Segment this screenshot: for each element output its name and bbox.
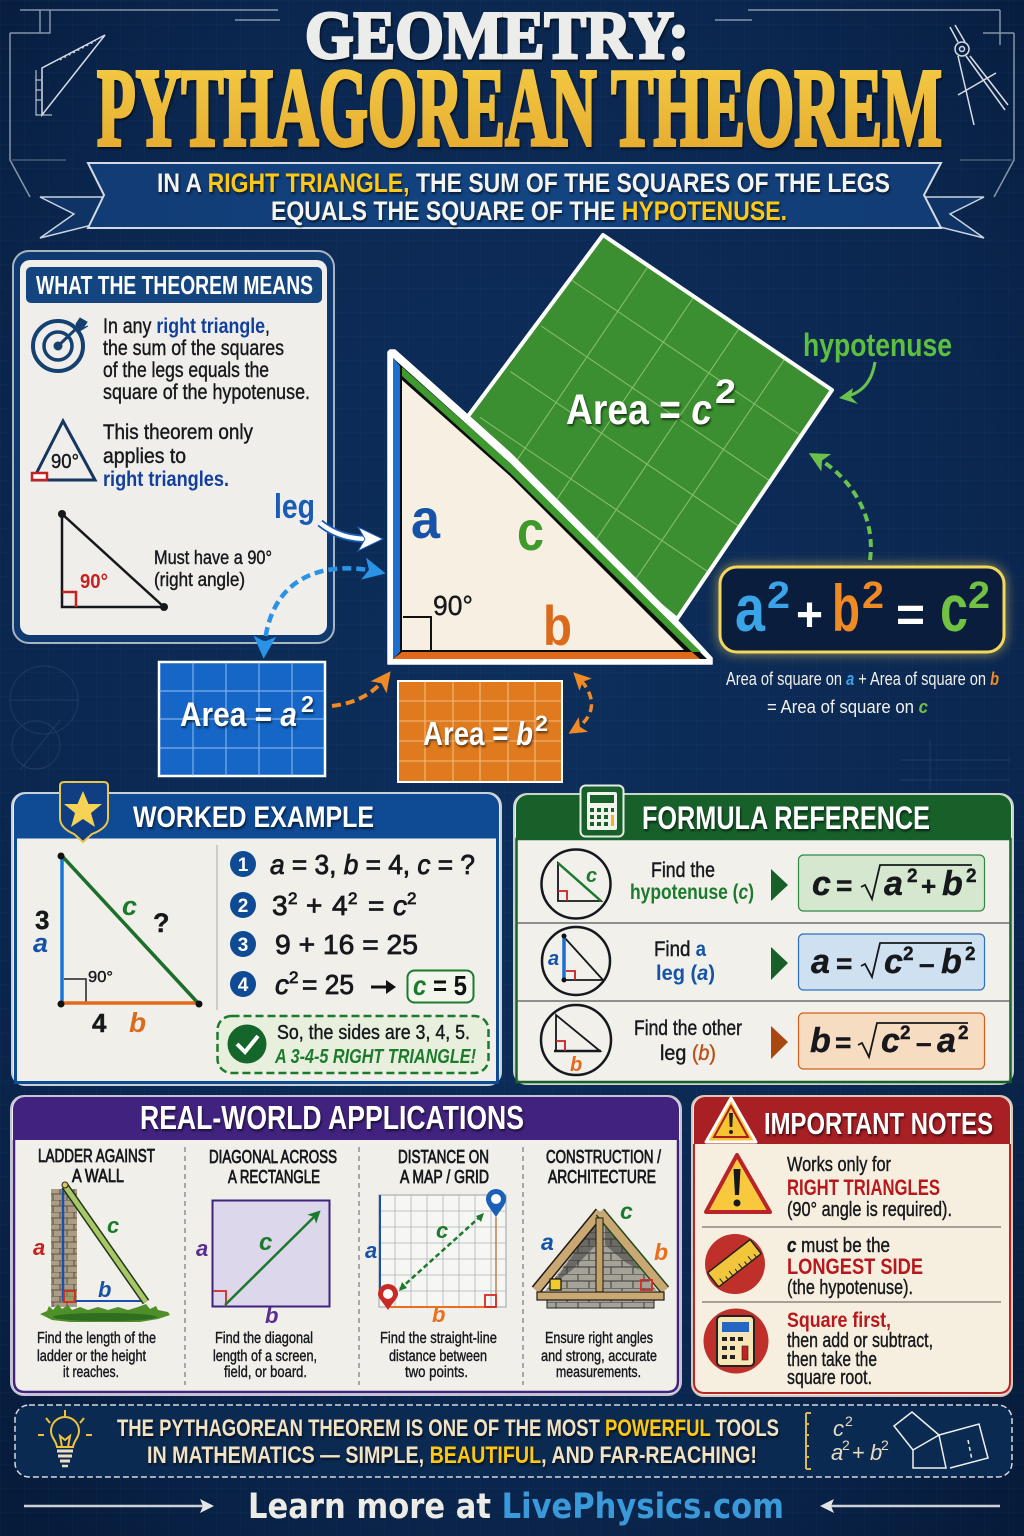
note: square first [704, 1308, 933, 1389]
label: area b squared: Area = b [423, 715, 533, 752]
label: area c squared [566, 373, 736, 434]
text: must have a 90 degree angle: Must have a 90° [154, 548, 272, 569]
label: leg: leg [274, 488, 315, 526]
illustration: rectangle with diagonal: a [196, 1236, 208, 1261]
text: find the other leg: Find the other [634, 1017, 742, 1040]
text: find the other leg [634, 1017, 742, 1065]
step 4: = 25 [302, 969, 354, 1000]
caption: and strong, accurate [541, 1348, 657, 1365]
row: find leg b [541, 1005, 984, 1076]
panel: important notes [692, 1096, 1012, 1396]
arrow: dashed orange between area b and side b [573, 676, 592, 731]
label: hypotenuse: hypotenuse [803, 327, 952, 363]
step 2: 4 [332, 890, 348, 921]
arrow [771, 1026, 788, 1059]
caption: Ensure right angles [545, 1330, 653, 1347]
caption: distance between [389, 1348, 487, 1365]
text: small formula: 2 [881, 1437, 889, 1453]
diagram: 3-4-5 triangle: b [129, 1007, 146, 1038]
text [787, 1154, 952, 1221]
icon: ruler [806, 1413, 811, 1469]
formula box: c [940, 571, 968, 645]
panel: real-world applications [11, 1096, 681, 1395]
icon: target with arrow [33, 318, 88, 371]
formula: a [798, 934, 984, 990]
badge: star shield [60, 782, 108, 842]
central right triangle [388, 350, 712, 664]
step 2: 2 [238, 896, 248, 917]
illustration: roof truss: b [654, 1239, 668, 1265]
icon: calculator [704, 1308, 768, 1374]
icon: triangle with 90 degrees [32, 421, 95, 480]
illustration: map grid with pins: b [432, 1302, 445, 1327]
arrow: footer left [24, 1499, 214, 1513]
icon: header warning triangle [706, 1098, 756, 1142]
caption: two points. [405, 1364, 468, 1381]
text: find a leg: Find a [654, 938, 706, 961]
text: formula in words: = Area of square on c [767, 697, 928, 717]
text: closing statement [117, 1415, 779, 1469]
text: square root. [787, 1367, 872, 1389]
formula: c: = [836, 870, 852, 901]
illustration: rectangle with diagonal [196, 1200, 330, 1328]
icon: light bulb [38, 1410, 92, 1466]
formula box: a [735, 571, 766, 645]
step 2: 2 [407, 889, 416, 908]
arrow: dashed blue between side a and area a [264, 568, 379, 652]
icon: triangle with leg a [542, 927, 610, 995]
illustration: roof truss: c [620, 1198, 633, 1224]
row: find hypotenuse [542, 850, 984, 918]
text: small formula: 2 [842, 1437, 850, 1453]
heading: formula reference: FORMULA REFERENCE [642, 800, 930, 836]
step 1: a = 3, b = 4, c = ? [270, 849, 475, 880]
icon: drawing compass [950, 25, 1008, 125]
step 4: c [275, 969, 289, 1000]
step 2: 2 [348, 889, 357, 908]
step 4 [230, 968, 474, 1002]
formula: a: = [836, 948, 852, 979]
text: then take the [787, 1349, 877, 1371]
text: small formula: + [852, 1440, 865, 1465]
callout: 3-4-5 right triangle: A 3-4-5 RIGHT TRIANGLE! [274, 1046, 476, 1068]
step 2: 3 [272, 890, 288, 921]
formula: b: b [810, 1022, 831, 1060]
side label c: c [517, 499, 544, 562]
heading: A RECTANGLE [228, 1166, 320, 1187]
formula: b [798, 1013, 984, 1069]
illustration: wall and ladder [33, 1182, 170, 1322]
step 2 [230, 889, 416, 921]
formula box: 2 [767, 575, 790, 617]
heading: A WALL [72, 1165, 124, 1186]
diagram: right triangle: 90° [80, 571, 108, 593]
formula box: = [896, 589, 925, 642]
icon: calculator [580, 786, 624, 836]
callout: 3-4-5 right triangle: So, the sides are 3, 4, 5. [277, 1022, 470, 1044]
text: applies only to right triangles [103, 421, 253, 491]
text: small formula: b [870, 1440, 882, 1465]
text: formula in words: Area of square on a + Area of square on b [726, 669, 999, 689]
text: theorem statement: square of the hypotenuse. [103, 381, 310, 404]
formula: b: 2 [958, 1023, 969, 1044]
illustration: map grid with pins: a [365, 1238, 377, 1263]
icon: squares on triangle sketch [894, 1412, 988, 1468]
text: formula in words [726, 669, 999, 717]
text: applies only to right triangles: This theorem only [103, 421, 253, 444]
step 3: 3 [238, 935, 248, 956]
formula: a: – [919, 948, 935, 979]
text: find a leg [654, 938, 715, 985]
text: theorem statement [103, 315, 310, 404]
heading: LADDER AGAINST [38, 1145, 155, 1166]
banner text: IN A RIGHT TRIANGLE, THE SUM OF THE SQUARES OF THE LEGS [157, 168, 890, 198]
illustration: map grid with pins: c [436, 1218, 448, 1243]
caption: Find the length of the [37, 1330, 156, 1347]
text: applies only to right triangles: right triangles. [103, 468, 229, 491]
text: LONGEST SIDE [787, 1254, 923, 1279]
caption: field, or board. [224, 1364, 307, 1381]
text [787, 1309, 933, 1389]
label: area a squared: 2 [301, 691, 314, 717]
formula box: 2 [862, 575, 884, 617]
text: closing statement: THE PYTHAGOREAN THEOREM IS ONE OF THE MOST POWERFUL TOOLS [117, 1415, 779, 1442]
application: ladder against a wall [33, 1145, 170, 1381]
steps list [230, 849, 475, 1002]
text: Square first, [787, 1309, 891, 1332]
heading [398, 1146, 489, 1187]
square on hypotenuse [467, 232, 834, 620]
caption [213, 1330, 317, 1381]
formula: a: b [941, 943, 962, 981]
text: Works only for [787, 1154, 891, 1176]
text: find a leg: leg (a) [656, 962, 715, 985]
formula: a: c [884, 943, 903, 981]
illustration: wall and ladder: b [98, 1277, 111, 1302]
illustration: roof truss [536, 1198, 668, 1308]
icon: set square and ruler sketch [36, 35, 105, 115]
illustration: rectangle with diagonal: c [259, 1229, 272, 1256]
caption: length of a screen, [213, 1348, 317, 1365]
step 3: 9 + 16 = 25 [275, 929, 418, 960]
angle label 90: 90° [433, 590, 473, 621]
formula: c: a [884, 865, 903, 903]
icon: triangle with leg a: a [548, 948, 559, 970]
formula: c: 2 [966, 866, 977, 887]
text: RIGHT TRIANGLES [787, 1175, 940, 1200]
application: distance on a map [365, 1146, 506, 1381]
closing banner [15, 1405, 1012, 1477]
icon: warning [706, 1155, 770, 1212]
text: small formula: c [833, 1416, 844, 1441]
text: find the hypotenuse [630, 859, 754, 904]
callout: 3-4-5 right triangle [218, 1016, 488, 1073]
heading [209, 1146, 337, 1187]
heading: what the theorem means [26, 267, 322, 303]
application: diagonal across a rectangle [196, 1146, 337, 1381]
footer: learn more: Learn more at LivePhysics.com [248, 1487, 784, 1527]
text: theorem statement: of the legs equals the [103, 359, 269, 382]
text: c must be the [787, 1235, 890, 1257]
text: find the other leg: leg (b) [660, 1042, 716, 1065]
diagram: 3-4-5 triangle: 3 [35, 905, 49, 935]
side label b: b [543, 594, 572, 657]
formula box [720, 567, 1004, 652]
text: theorem statement: In any right triangle, [103, 315, 270, 338]
heading: what the theorem means: WHAT THE THEOREM MEANS [36, 270, 313, 300]
text: find the hypotenuse: Find the [651, 859, 715, 882]
text: small formula [831, 1413, 889, 1465]
illustration: wall and ladder: a [33, 1235, 45, 1260]
caption: Find the straight-line [380, 1330, 497, 1347]
heading: ARCHITECTURE [548, 1166, 656, 1187]
square on leg b [398, 681, 562, 782]
caption [541, 1330, 657, 1381]
heading: DISTANCE ON [398, 1146, 489, 1167]
label: area b squared: 2 [535, 711, 548, 736]
text: small formula: a [831, 1440, 843, 1465]
application: construction [536, 1146, 668, 1381]
formula: b: 2 [900, 1023, 911, 1044]
icon: ruler [705, 1234, 765, 1294]
note: c is longest side [705, 1234, 923, 1299]
icon: triangle with leg b: b [570, 1054, 582, 1076]
illustration: wall and ladder: c [107, 1213, 119, 1238]
formula box: b [832, 571, 860, 645]
side label a: a [411, 487, 441, 550]
note: right triangles only [706, 1154, 952, 1221]
text: then add or subtract, [787, 1330, 933, 1352]
diagram: 3-4-5 triangle [33, 852, 202, 1038]
banner text: EQUALS THE SQUARE OF THE HYPOTENUSE. [271, 196, 787, 226]
heading: A MAP / GRID [400, 1166, 489, 1187]
diagram: right triangle [58, 510, 168, 611]
step 2: c [393, 890, 407, 921]
text: applies only to right triangles: applies to [103, 445, 186, 468]
arrow [771, 947, 788, 980]
heading: real-world applications: REAL-WORLD APPLICATIONS [140, 1099, 524, 1136]
icon: triangle with 90 degrees: 90° [51, 451, 79, 473]
illustration: roof truss: a [541, 1229, 554, 1255]
arrow: footer right [820, 1499, 1000, 1513]
caption [37, 1330, 156, 1381]
formula: b: = [835, 1027, 851, 1058]
arrow: leg to side a [320, 523, 383, 551]
label: area a squared: Area = a [180, 696, 297, 734]
caption: ladder or the height [37, 1348, 146, 1365]
square on leg a [159, 662, 325, 776]
formula: c: c [812, 865, 831, 903]
step 2: = [368, 890, 384, 921]
formula: b: c [881, 1022, 900, 1060]
formula: a: 2 [903, 944, 914, 965]
arrow: hypotenuse label to square [839, 362, 875, 404]
icon: triangle with hypotenuse c [542, 850, 610, 918]
arrow: dashed orange from area a to triangle [332, 676, 387, 706]
formula: a: 2 [965, 944, 976, 965]
text [787, 1235, 923, 1299]
arrow: dashed green from formula to square [814, 456, 871, 560]
diagram: 3-4-5 triangle: 4 [92, 1008, 107, 1038]
diagram: 3-4-5 triangle: a [33, 928, 48, 958]
step 2: + [306, 890, 322, 921]
step 4: 2 [289, 968, 298, 987]
formula: b: a [937, 1022, 956, 1060]
panel: formula reference [514, 786, 1013, 1084]
caption: measurements. [556, 1364, 641, 1381]
illustration: rectangle with diagonal: b [265, 1303, 278, 1328]
heading [38, 1145, 155, 1186]
heading: DIAGONAL ACROSS [209, 1146, 337, 1167]
formula box: + [796, 589, 823, 642]
row: find leg a [542, 927, 984, 995]
caption [380, 1330, 497, 1381]
panel: what the theorem means [13, 251, 334, 643]
ribbon banner [40, 163, 984, 238]
step 1: 1 [238, 855, 249, 876]
formula: b: – [916, 1027, 932, 1058]
text: (90° angle is required). [787, 1199, 952, 1221]
formula: c [798, 855, 984, 911]
formula: c: + [921, 871, 936, 901]
text: must have a 90 degree angle: (right angle) [154, 570, 245, 591]
icon: triangle with leg b [541, 1005, 611, 1076]
formula box: 2 [968, 575, 990, 617]
label: area c squared: 2 [715, 373, 736, 411]
step 2: 2 [288, 889, 297, 908]
diagram: 3-4-5 triangle: 90° [88, 969, 113, 986]
text: find the hypotenuse: hypotenuse (c) [630, 881, 754, 904]
icon: triangle with hypotenuse c: c [586, 865, 597, 887]
text: small formula: 2 [845, 1413, 853, 1429]
heading: CONSTRUCTION / [546, 1146, 662, 1167]
formula: c: b [942, 865, 963, 903]
text: must have a 90 degree angle [154, 548, 272, 591]
title [97, 0, 942, 170]
diagram: 3-4-5 triangle: ? [153, 908, 170, 938]
caption: Find the diagonal [215, 1330, 313, 1347]
heading: worked example: WORKED EXAMPLE [133, 801, 374, 834]
diagram: 3-4-5 triangle: c [122, 891, 137, 921]
text: theorem statement: the sum of the squares [103, 337, 284, 360]
banner text [157, 168, 890, 226]
step 4: 4 [238, 975, 249, 996]
arrow [771, 869, 788, 901]
illustration: map grid with pins [365, 1189, 506, 1327]
heading [546, 1146, 662, 1187]
step 4: c = 5 [413, 970, 467, 1001]
label: area c squared: Area = c [566, 386, 712, 434]
text: closing statement: IN MATHEMATICS — SIMPLE, BEAUTIFUL, AND FAR-REACHING! [147, 1442, 757, 1469]
panel: worked example [12, 782, 501, 1085]
text: (the hypotenuse). [787, 1277, 913, 1299]
formula: c: 2 [907, 866, 918, 887]
caption: it reaches. [63, 1364, 119, 1381]
formula: a: a [811, 943, 830, 981]
